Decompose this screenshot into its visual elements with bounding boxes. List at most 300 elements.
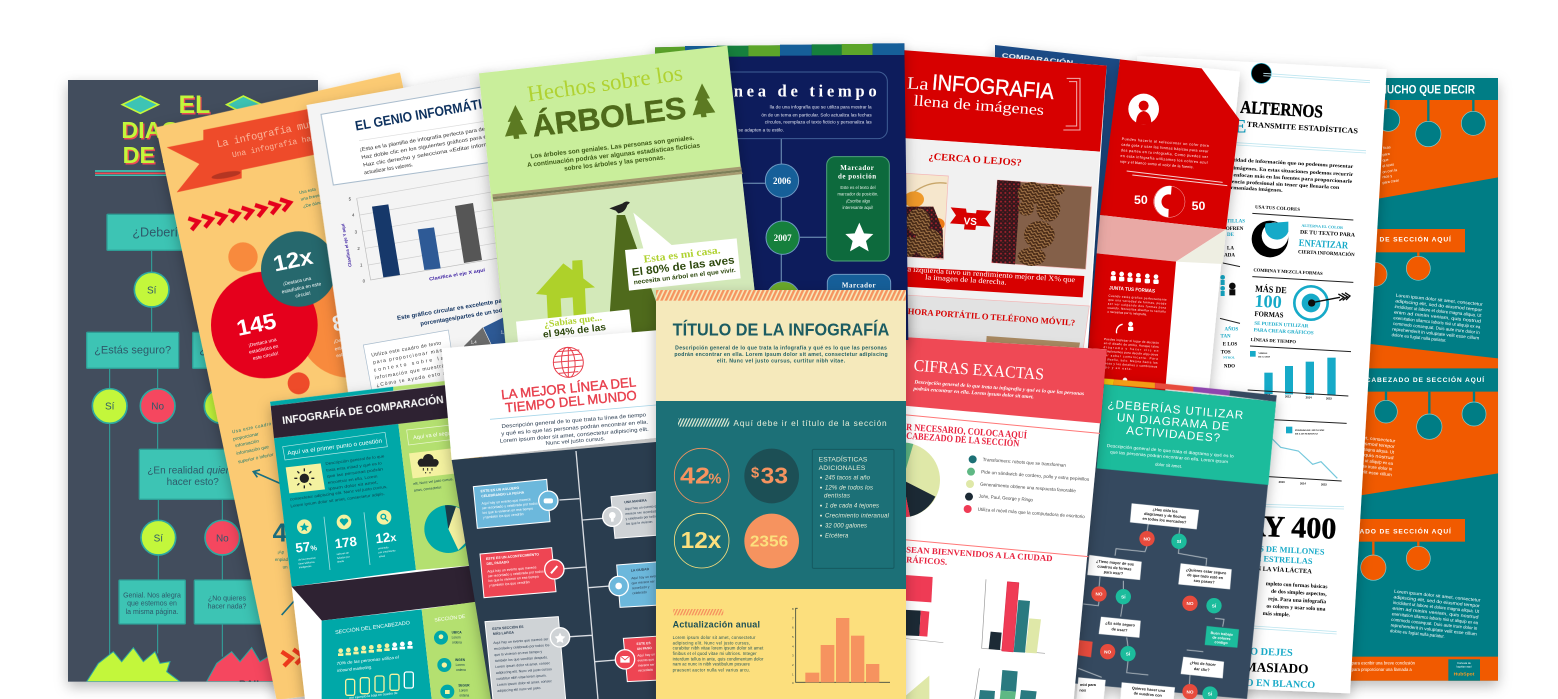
panel: orange block 2 [1290,392,1498,507]
card: blue right: recordado y [632,585,650,590]
stat: 8x [330,310,347,358]
icon: people pictogram [1220,275,1236,296]
text block: left column fragments [1217,219,1245,369]
card: marcador de posición: marcador de posición. [838,192,878,197]
pie chart [464,317,520,360]
panel: orange block 1 [1290,100,1498,214]
box: estadísticas adicionales: Crecimiento interanual [825,514,890,520]
card: gray event: adipiscing elit. Nunc vel justo cursus [496,667,552,675]
decision nodes [1091,531,1222,699]
callout box: información que muestra [374,363,445,381]
panel: orange block 1: el texto [1382,163,1394,168]
text block: description: Nunc vel justo cursus. [545,436,606,447]
panel: red lower: JUNTA TUS FORMAS [1109,285,1156,295]
text block: red intro [1120,137,1210,171]
pie chart: 1,2 [501,329,507,334]
heading: hay 400: HAY 400 [1221,509,1337,546]
text block: left column fragments: ADA [1224,254,1235,259]
text block: lorem 1: incididunt ut labore et dolore magna aliqua. Ut [1394,304,1482,318]
heading: comparación: COMPARACIÓN [1001,50,1074,67]
panel: cerca o lejos: a izquierda tuvo un rendimiento mejor del X% que [907,264,1075,284]
text block: lorem 1: enim ad minim veniam, quis nostrud [1394,310,1482,324]
header box: actualizar los valores. [364,162,414,176]
text block: enfatizar [1298,224,1356,258]
text block: left column fragments: NDO [1224,364,1235,369]
text block: left column fragments: DE [1227,233,1235,238]
text block: intro: imágenes. En estas situaciones podemos recurrir [1233,165,1354,178]
card: marcador de posición: Este es el texto del [840,185,876,190]
card: marcador de posición: Marcador [840,164,874,172]
sheet: título de la infografía (centre) [656,290,906,699]
decorative stripes [656,290,906,301]
text block: lorem 3 [1390,589,1481,642]
header: question: ¿DEBERÍAS UTILIZAR [1107,398,1244,422]
sheet: diagrama de actividades: Quieres hacer una [1132,686,1166,693]
stat: $33: $ [751,465,759,481]
card: gray event: Lorem ipsum dolor sit amet, consec [495,661,551,669]
text block: intro: enfocan más en las fuentes para proporcionarle [1233,172,1353,185]
decision nodes: NO [1104,649,1112,654]
heading: alternos: ALTERNOS [1240,97,1323,122]
heading: alternos: E [1234,116,1246,137]
panel: red lower: Puedes ingresar el lugar de decisión [1104,337,1159,345]
bar chart: horizontal [897,574,943,643]
footer: conclusion: Cortesía de [1457,661,1471,665]
icon: black dot [1251,63,1271,83]
line chart: período de atención: 2013 [1279,480,1285,484]
header box: Haz clic derecho y selecciona «Editar información» [363,138,508,169]
text block: intro: lla de una infografía que se utiliza para mostrar la [770,105,872,110]
stat: 12x: por crecimiento [378,549,396,554]
chart: stacked bars [897,668,1037,699]
panel: orange block 2: reprehenderit in voluptate velit esse cillum [1305,463,1392,477]
card: blue event [473,479,558,528]
timeline node: 2007: 2007 [774,233,792,243]
text block: formas básicas [1262,581,1328,618]
card: gray event: que lo vivieron en ese tiempo y [494,650,543,657]
decision nodes: NO [1096,592,1103,597]
arrow [253,470,295,615]
box: estadísticas adicionales: 1 de cada 4 tejones [825,504,879,510]
section heading: Aquí debe ir el título de la sección [733,418,887,428]
pie chart: 1,4 [471,339,477,344]
pie chart [424,505,473,553]
header: red title band [893,49,1107,152]
text block: body: Lorem ipsum dolor sit amet, consectetur [673,635,756,640]
star bursts: BAIL [239,679,262,690]
line chart: período de atención: DE LOS PERSONAS [1295,433,1319,436]
panel: yellow annual update [656,589,906,699]
box: estás seguro: ¿Estás seguro? [94,344,171,356]
text block: intro [738,105,872,133]
bar chart [340,175,507,284]
timeline node: 2006: 2006 [773,176,791,186]
bar chart: histogram: 5 [792,635,794,639]
icon: colour drop [1252,221,1288,257]
card: blue right [609,562,660,607]
title: la mejor línea: LA MEJOR LÍNEA DEL [501,374,637,402]
icon: people row [338,641,413,656]
icon: house [536,260,595,330]
title: el diagrama de: EL [179,92,210,119]
text block: más de 100 formas: PARA CREAR GRÁFICOS [1253,327,1314,336]
stat: 2356 [744,514,799,568]
bar chart: histogram: 3 [792,654,794,658]
icon: person in circle [1128,94,1159,124]
text: líneas de tiempo: LÍNEAS DE TIEMPO [1251,337,1297,345]
decision nodes: NO [1144,536,1151,541]
band: dark fold [292,565,480,621]
heading: árboles: ÁRBOLES [530,90,688,144]
panel: red lower [1085,253,1176,393]
description: elit. Nunc vel justo cursus, curtitur nibh vitae. [717,359,846,365]
timeline node: third [767,282,800,315]
sheet: la mejor línea del tiempo [442,330,660,699]
stat: 4: un [283,564,288,569]
text: usa tus colores: USA TUS COLORES [1255,205,1301,213]
panel: lower green: INGEN [455,658,466,662]
text block: formas básicas: os colores y usar solo una [1266,604,1326,613]
box: genial: la misma página. [126,609,178,616]
text block: red intro: en esta infografía utilizamos los colores azul [1120,154,1208,165]
banner: section heading 1: ENCABEZADO DE SECCIÓN AQUÍ [1322,235,1452,244]
description [674,346,888,365]
bubbles [211,231,403,394]
stat: $33 [744,449,799,503]
sheet: orange banner infographic [156,72,527,699]
panel: red lower: completamos para decidir algo otros [1103,349,1159,357]
stat: 145: estadística en [249,344,279,356]
card: red event: los que lo vivieron en ese tiempo [488,575,539,583]
text block: lorem 3: dolore eu fugiat nulla pariatur. [1390,628,1445,639]
card: gray event: Aquí hay un evento que merece ser [493,637,549,645]
timeline node: 2007 [766,221,799,254]
stat: 57% [295,519,318,569]
bar chart: histogram: 2 [792,663,794,667]
panel: red lower: Cuando estés gráfico perfectamente [1108,294,1167,302]
sheet: diagrama de actividades: de usar? [1111,627,1128,633]
legend: Pide un sándwich de cordero, pollo y extra pepinillos [981,469,1090,482]
bar chart: histogram: 4 [792,644,794,648]
heading: alternos: TRANSMITE ESTADÍSTICAS [1247,119,1358,135]
nodes: third row: No [216,533,229,544]
legend [964,455,1090,519]
stat: 178: helados por [337,555,350,560]
bar chart: videos de gatos: 2014 [1306,395,1312,399]
text block: left column fragments: LA [1227,246,1234,251]
panel: green column [398,417,477,570]
stat: 8x: estad [334,344,347,352]
card: gray event: también los que vendrán después. [495,655,548,663]
panel: lower green: Lorem [456,663,465,667]
bar chart: 3 [355,229,358,234]
text block: enfatizar: CIERTA INFORMACIÓN [1298,249,1355,258]
panel: lower green: Lorem [452,635,461,639]
bar chart: histogram [792,607,890,685]
heading: ciudad gráficos: SEAN BIENVENIDOS A LA CIUDAD [906,544,1053,563]
heading: actualización anual: Actualización anual [673,620,760,630]
bar chart: videos de gatos: 2015 [1326,396,1332,400]
card: gray right [603,491,660,538]
nodes: second row [92,389,239,423]
card: blue right: que merece ser [631,579,656,585]
heading: alternos [1234,97,1358,137]
text: combina y mezcla: COMBINA Y MEZCLA FORMAS [1253,268,1323,277]
text block: lorem 3: commodo consequat. Duis aute irure dolor in [1391,617,1478,631]
banner: section heading 1 [1290,229,1465,286]
sheet: cifras exactas [865,337,1107,699]
panel: portátil o móvil: ¿AHORA PORTÁTIL O TELÉFONO MÓVIL? [897,305,1076,328]
card: marcador de posición: de posición [838,173,877,181]
text block: enfatizar: DE TU TEXTO PARA [1300,230,1355,239]
box: en realidad: hacer esto? [167,477,219,488]
stat: 57%: inteligentes [299,565,312,569]
chart: donut 50/50 [1134,186,1206,217]
box: estadísticas adicionales: ESTADÍSTICAS [819,455,868,464]
card: red right: evento que [637,658,654,663]
panel: orange block 1: que [1382,158,1389,163]
bar chart: videos de gatos [1248,351,1348,400]
stat: 12x: 12x [271,244,316,277]
star bursts [86,646,273,682]
heading: línea de tiempo: Línea de tiempo [711,82,877,101]
stat: 12x: estadística en este [281,281,322,295]
heading: mucho que decir: TENGO MUCHO QUE DECIR [1340,82,1475,96]
card: red right: ESTE ES [636,641,652,646]
text block: intro: ón de un tema en particular. Solo actualiza las fechas [761,112,872,117]
text block: enfatizar: ENFATIZAR [1299,238,1349,252]
panel: red lower: cuando. Necesitas diseñar tu tamaño [1107,306,1166,314]
stat: 12x [375,510,397,558]
text block: red intro: dos partes en tu infografía. Como puedes ver [1121,148,1209,159]
header: red title band: La [906,73,930,94]
text block: lorem 3: Lorem ipsum dolor sit amet, consectetur [1394,589,1481,603]
panel: teal column: Aquí va el primer punto o cuestión [287,439,382,457]
card: blue right: Aquí hay un evento [631,574,660,580]
panel: red lower: en el diseño de arriba. Aunque tales [1104,341,1159,349]
callout: speech bubble: El 80% de las aves [631,254,735,279]
bar chart: histogram: 0 [792,681,794,685]
stat: 12x: 12x [375,529,397,546]
text block: más de 100 formas: FORMAS [1254,309,1284,320]
text block: body: praesent auctor nulla vel varius arcu. [673,667,750,672]
text block: formas básicas: más simple. [1262,611,1291,618]
bar chart: Clasifica el eje X aquí [429,267,486,282]
text block: left column fragments: TAN [1221,334,1231,339]
text block: lorem 1: dolore eu fugiat nulla pariatur. [1391,332,1447,343]
card: blue right: LA CIUDAD [631,567,650,573]
box: estadísticas adicionales [812,449,894,568]
title: el diagrama de: DE FLUJO [124,143,239,169]
text block: usa este cuadro: proporcionar [232,431,260,442]
callout: speech bubble: Esta es mi casa. [643,245,721,266]
sheet: red shapes infographic [1085,59,1240,397]
sheet: diagrama de actividades: ¿Has de hacer [1190,661,1216,667]
icon: bird [609,201,630,213]
card: marcador [827,274,891,341]
chevrons lower [282,649,303,666]
text block: red intro: cada gota y usar las formas básicas para crear [1121,143,1209,154]
card: red event: y también los que vendrán [489,580,530,588]
card: gray right: UNA MANERA [624,498,648,504]
stat: 178: tienda [337,560,345,564]
box: en realidad: ¿En realidad quieres [147,465,239,476]
text block: body [673,635,764,672]
sheet: diagrama de actividades: de que todo esté en [1187,573,1224,580]
stat: 57%: 57% [295,538,318,556]
decision nodes: NO [1187,601,1194,606]
header [270,379,463,438]
stat: 4: enpiad [275,557,289,562]
bar chart: 5 [349,197,352,202]
header box: Haz doble clic en los siguientes gráficos para editarlos [361,131,507,161]
card: red event: DEL PASADO [486,560,509,566]
panel: portátil o móvil [893,294,1089,360]
stat: 12x: 12x [681,527,721,553]
card: red right: recordado [638,668,653,673]
panel: orange block 1: para crear [1382,178,1400,185]
bar chart: 0 [363,279,366,284]
banner: ribbon: Una infografía hace [231,133,322,160]
text block: description: Descripción general de lo que trata tu línea de tiempo [501,412,646,430]
text block: lorem 3: exercitation ullamco laboris nisi ut aliquip ex ea [1392,611,1479,625]
stat: 4: ¡Ap [277,549,285,554]
decision nodes: SÍ [1212,601,1217,608]
callout box: contexto sobre la [373,355,444,374]
bar chart: 1 [360,263,363,268]
bar chart: histogram: 1 [792,672,794,676]
card: red event: ESTE ES UN ACONTECIMIENTO [486,552,539,561]
callout box [363,330,460,417]
bar chart: histogram: 6 [792,626,794,630]
box: estadísticas adicionales: Etcétera [825,534,849,540]
card: gray right: y celebrado por todos [625,514,658,521]
panel: lower green: ordena [459,694,469,698]
panel: red lower: líneas y los detalles y cambiamos [1102,361,1158,369]
icon: target and arrow [1294,286,1350,320]
footer: conclusion [1290,657,1498,681]
image: pine cones [992,180,1092,269]
card: gray event: MÁS LARGA [493,630,515,636]
text block: left column fragments: TOS [1221,350,1231,355]
stat: 2356: 2356 [750,534,788,551]
card: gray right: Aquí hay un evento que [625,504,660,511]
text block: no dejes demasiado espacio: ESPACIO EN BLANCO [1210,676,1315,691]
banner: section heading 3: ENCABEZADO DE SECCIÓN AQUÍ [1322,526,1452,535]
heading: gráfico circular: Este gráfico circular es excelente para mostrar [397,293,533,322]
sheet: diagrama de actividades: ¿Quieres estar seguro [1186,568,1227,575]
card: gray right: los que lo vivieron [626,520,653,526]
heading: ciudad gráficos: RÁFICOS. [906,554,948,567]
text block: lorem 3: incididunt ut labore et dolore magna aliqua. Ut [1393,600,1480,614]
footer: conclusion: para escribir una breve conclusión [1352,660,1416,665]
panel: green column: elit. Nunc vel justo cursus, [413,477,454,486]
text: usa esta: Usa esta [298,186,317,195]
bar chart: histogram: 8 [792,607,794,611]
decision nodes: SÍ [1126,649,1131,656]
stat: 4 [273,518,289,569]
text block: left column fragments: E LOS [1223,343,1238,348]
text block: usa este cuadro [231,421,274,464]
panel: orange block 2: adipiscing elit, sed do eiusmod tempor [1308,435,1396,449]
text block: formas básicas: mpleto con formas básicas [1266,581,1328,590]
line chart: período de atención: 2014 [1300,481,1306,485]
bar chart: videos de gatos: DE GATOS [1258,355,1271,358]
chart: donut 50/50: 50 [1134,193,1148,207]
text block: intro: se adapten a tu estilo. [738,128,784,133]
stat: 8x: 8 [330,310,347,337]
line chart: período de atención: 2015 [1321,482,1327,486]
pie chart [865,443,940,517]
text block: red intro: Puedes hacerlo al seleccionar un color para [1122,137,1210,148]
text block: lorem 1: adipiscing elit, sed do eiusmod tempor [1395,298,1483,312]
panel: red lower: diagrama y hacer clic en [1103,345,1159,353]
node: sí [134,272,169,307]
stat: 145: 145 [234,308,278,341]
heading: section 2: UN ENCABEZADO DE SECCIÓN AQUÍ [1341,375,1485,384]
text block: left column fragments: AÑOS [1224,327,1239,333]
icon: trees [505,83,715,139]
text block: lorem 1: exercitation ullamco laboris nisi ut aliquip ex ea [1393,315,1481,329]
line chart: período de atención: PERÍODO DE ATENCIÓN [1295,429,1325,432]
header: question: que las personas podrán encontrar en ella. Lorem ipsum [1110,449,1229,464]
text block: intro: círculos, reemplaza el texto ficticio y personaliza las [765,120,872,125]
panel: lower green: SECCIÓN DE [434,613,466,624]
panel: cerca o lejos: la imagen de la derecha. [925,272,1007,287]
legend: Utiliza el móvil más que la computadora de escritorio [978,507,1085,519]
card: marcador de posición [827,157,889,261]
text block: lorem 3: adipiscing elit, sed do eiusmod tempor [1393,594,1481,608]
stat: 145: este círculo! [252,351,279,362]
callout: sabías que: el 94% de las [542,322,607,341]
sheet: diagrama de actividades: para usar? [1103,570,1124,576]
divider strip [492,167,743,202]
header box: ¡Esta es la plantilla de infografía perfecta para demostrar [359,123,505,153]
panel: teal column: Lorem ipsum dolor sit amet, consectetur adipis. [290,491,385,508]
panel: orange block 2: exercitation ullamco laboris nisi ut aliquip ex ea [1306,452,1394,466]
text block: más de 100 formas: SE PUEDEN UTILIZAR [1254,322,1309,330]
title: el diagrama de: DIAGRAMA [123,118,251,144]
chart: donut 50/50: 50 [1192,199,1206,213]
panel: lower green: ordena [456,668,466,672]
text block: formas básicas: rejo. Para una infografía [1268,596,1326,605]
box: estadísticas adicionales: 32 000 galones [825,524,867,530]
card: gray event: recordado y celebrado por todos los [494,643,550,651]
callout box: para proporcionar más [373,348,443,366]
title: la mejor línea: TIEMPO DEL MUNDO [505,388,637,415]
timeline node: 2006 [765,164,799,197]
sheet: diagrama de actividades: de colores [1212,636,1231,641]
line chart: período de atención [1268,427,1342,486]
decision nodes: NO [1187,689,1194,694]
panel: lower green: SEGUR [458,684,470,688]
box: estás seguro [87,332,279,368]
panel: lower teal [322,609,432,699]
title: el diagrama de: DIAGRAMA [121,117,250,143]
panel: lower green [422,602,493,699]
text block: usa este cuadro: superior o inferior [237,452,274,464]
sheet: diagrama de actividades: nos [1079,689,1086,693]
sheet: white "alternos" infographic [1137,56,1387,693]
flow chart [1078,523,1224,685]
stat: 8x: ¡Des [333,337,344,344]
text block: intro: Los árboles son geniales. Las personas son geniales. [530,135,695,160]
panel: green column: Aquí va el segundo [413,429,460,441]
box: no quieres [194,580,263,624]
panel: teal column: ipsum dolor sit amet, [328,480,378,491]
stat: 178: 178 [334,534,358,551]
footer: conclusion: HubSpot [1454,671,1475,677]
